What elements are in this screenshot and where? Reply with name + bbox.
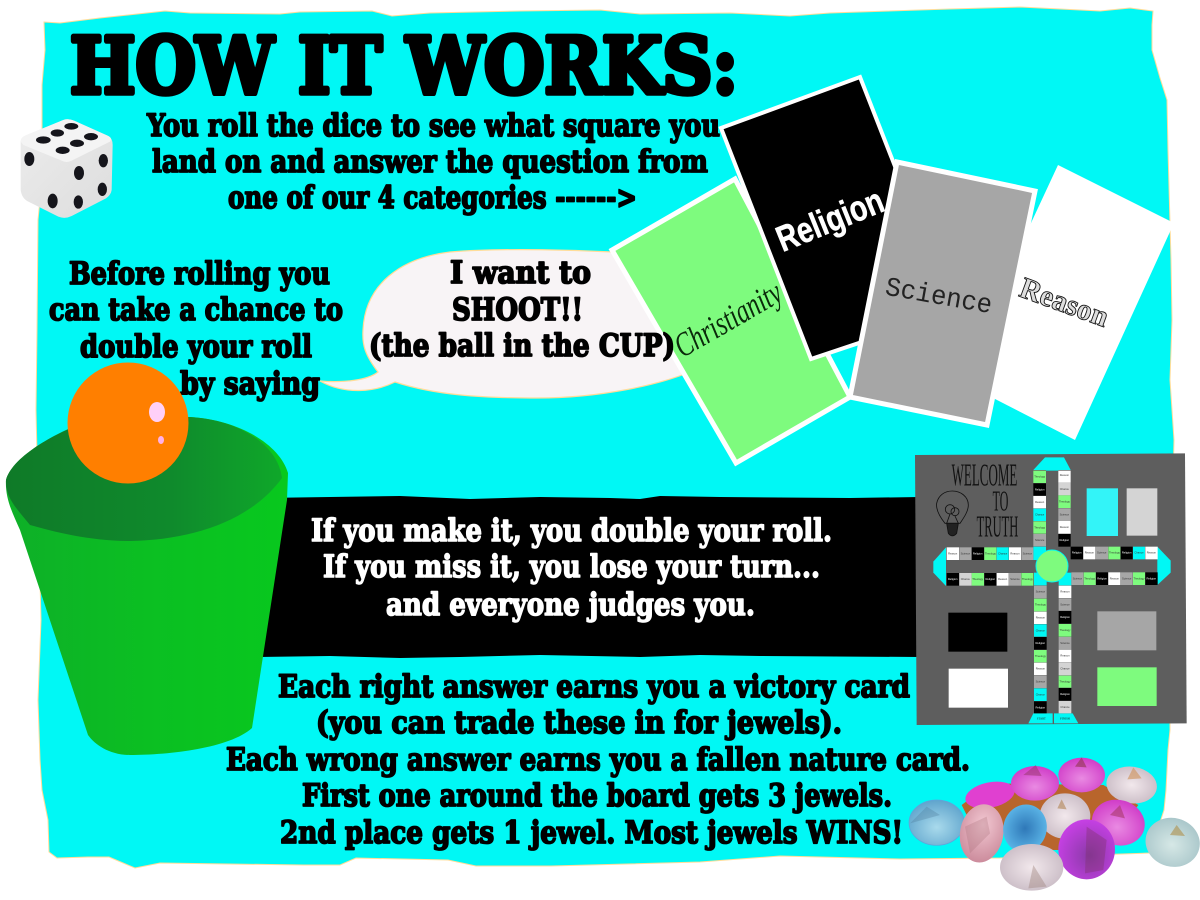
left column bottom: Science [1036, 590, 1046, 594]
left column top: Science [1035, 538, 1045, 542]
bottom row right: Theology [1084, 576, 1096, 580]
left column top: Reason [1035, 500, 1045, 504]
right column bottom: Science [1060, 602, 1070, 606]
top row right: Religion [1072, 551, 1082, 555]
speech bubble [320, 250, 695, 398]
bottom row left [947, 573, 1033, 586]
icon: dice [21, 119, 113, 218]
bottom row right: Science [1122, 576, 1132, 580]
top row right: Chance [1134, 551, 1144, 555]
text: rules: Each wrong answer earns you a fallen nature card. [226, 742, 970, 778]
bottom row right: Religion [1097, 576, 1107, 580]
board heading [952, 457, 1018, 544]
left column bottom [1034, 573, 1047, 713]
right column top [1058, 471, 1071, 547]
text: rules: Each right answer earns you a victory card [278, 669, 910, 705]
right column bottom: Theology [1060, 679, 1071, 683]
right column bottom: Reason [1060, 654, 1070, 658]
right column bottom: Science [1060, 641, 1070, 645]
top row right: Science [1097, 551, 1107, 555]
right column bottom: Reason [1060, 590, 1070, 594]
right column top: Religion [1060, 538, 1070, 542]
bottom row left: Theology [972, 577, 984, 581]
icon: light bulb [937, 491, 968, 536]
text: band message: and everyone judges you. [386, 587, 755, 623]
bottom row right: Theology [1134, 576, 1145, 580]
right column top: Science [1060, 512, 1070, 516]
left column bottom: Chance [1036, 628, 1045, 632]
right column bottom: Religion [1060, 615, 1070, 619]
text: rules: (you can trade these in for jewels). [316, 705, 842, 741]
text: band message [311, 513, 832, 623]
title: HOW IT WORKS: [70, 21, 738, 112]
left column bottom: Reason [1036, 616, 1045, 620]
left column bottom: Chance [1036, 692, 1045, 696]
bottom row right: Science [1073, 576, 1083, 580]
right column bottom: Chance [1060, 705, 1070, 709]
text: band message: If you miss it, you lose your turn... [323, 549, 820, 585]
board centre circle [1036, 550, 1068, 582]
left column bottom: Science [1036, 679, 1046, 683]
top row right: Theology [1109, 551, 1120, 555]
top row left: Chance [998, 551, 1008, 555]
text: bubble words: (the ball in the CUP) [369, 328, 675, 364]
right column top: Theology [1059, 499, 1070, 503]
top row left: Theology [985, 551, 996, 555]
left column bottom: Religion [1036, 641, 1046, 645]
game board: FINISH [1060, 716, 1071, 720]
text: bubble words [369, 255, 675, 364]
bottom row left: Religion [986, 577, 996, 581]
card: religion [721, 77, 952, 359]
left column top: Religion [1035, 487, 1045, 491]
text: rules: 2nd place gets 1 jewel. Most jewels WINS! [280, 815, 903, 851]
card: religion: Religion [770, 180, 889, 260]
bottom row left: Science [1010, 577, 1020, 581]
game board: WELCOME [952, 457, 1017, 492]
text: bubble words: I want to [450, 255, 591, 291]
right column top: Reason [1060, 525, 1069, 529]
game board: START [1037, 716, 1046, 720]
card: science: Science [883, 274, 994, 322]
card: reason: Reason [1015, 271, 1113, 334]
right column bottom: Religion [1060, 692, 1070, 696]
right column bottom: Theology [1060, 628, 1071, 632]
intro text: one of our 4 categories ------> [228, 180, 637, 216]
icon: orange ball [68, 362, 188, 484]
bottom row left: Chance [961, 577, 970, 581]
icon: jewels [909, 757, 1200, 891]
game board: TRUTH [977, 510, 1018, 544]
text: before rolling [49, 256, 343, 402]
right column bottom: Chance [1060, 667, 1070, 671]
text: before rolling: Before rolling you [69, 256, 330, 292]
bottom row left: Religion [948, 577, 958, 581]
card slots [948, 488, 1157, 708]
bottom row right: Reason [1110, 576, 1119, 580]
top row left: Religion [973, 551, 983, 555]
bottom row left: Reason [998, 577, 1008, 581]
top row left: Science [1023, 551, 1033, 555]
black band [258, 496, 920, 658]
top row left: Reason [1010, 551, 1020, 555]
text: band message: If you make it, you double your roll. [311, 513, 832, 549]
board heading: TO [993, 486, 1008, 518]
intro text: land on and answer the question from [152, 144, 708, 180]
left column top: Theology [1034, 525, 1046, 529]
top row right: Reason [1085, 551, 1094, 555]
top row right: Religion [1122, 551, 1132, 555]
top row left [947, 547, 1033, 560]
left column bottom: Theology [1035, 654, 1046, 658]
right column top: Reason [1060, 473, 1069, 477]
text: before rolling: by saying [180, 366, 320, 402]
top row right [1071, 547, 1158, 559]
bottom row right: Religion [1147, 576, 1157, 580]
card: christianity: Christianity [668, 274, 789, 365]
text: rules: First one around the board gets 3 jewels. [302, 778, 892, 814]
card: christianity [612, 179, 850, 463]
card: science [850, 162, 1035, 425]
intro text [146, 108, 720, 216]
text: bubble words: SHOOT!! [452, 292, 583, 328]
text: rules [226, 669, 970, 851]
top row left: Reason [948, 551, 958, 555]
text: before rolling: double your roll [80, 329, 312, 365]
top row left: Science [961, 551, 971, 555]
board end caps [933, 457, 1171, 723]
right column top: Chance [1060, 487, 1069, 491]
intro text: You roll the dice to see what square you [146, 108, 720, 144]
left column top: Theology [1034, 475, 1046, 479]
bottom row left: Theology [1022, 577, 1033, 581]
left column bottom: Theology [1035, 603, 1046, 607]
right column bottom [1059, 573, 1071, 713]
card: reason [958, 165, 1174, 440]
left column top: Chance [1035, 513, 1045, 517]
bottom row right [1071, 572, 1158, 585]
game board [915, 453, 1187, 725]
top row right: Reason [1147, 551, 1156, 555]
text: before rolling: can take a chance to [49, 292, 343, 328]
icon: green cup [6, 417, 288, 755]
left column bottom: Religion [1036, 705, 1046, 709]
left column top [1033, 471, 1046, 560]
left column bottom: Reason [1036, 667, 1045, 671]
